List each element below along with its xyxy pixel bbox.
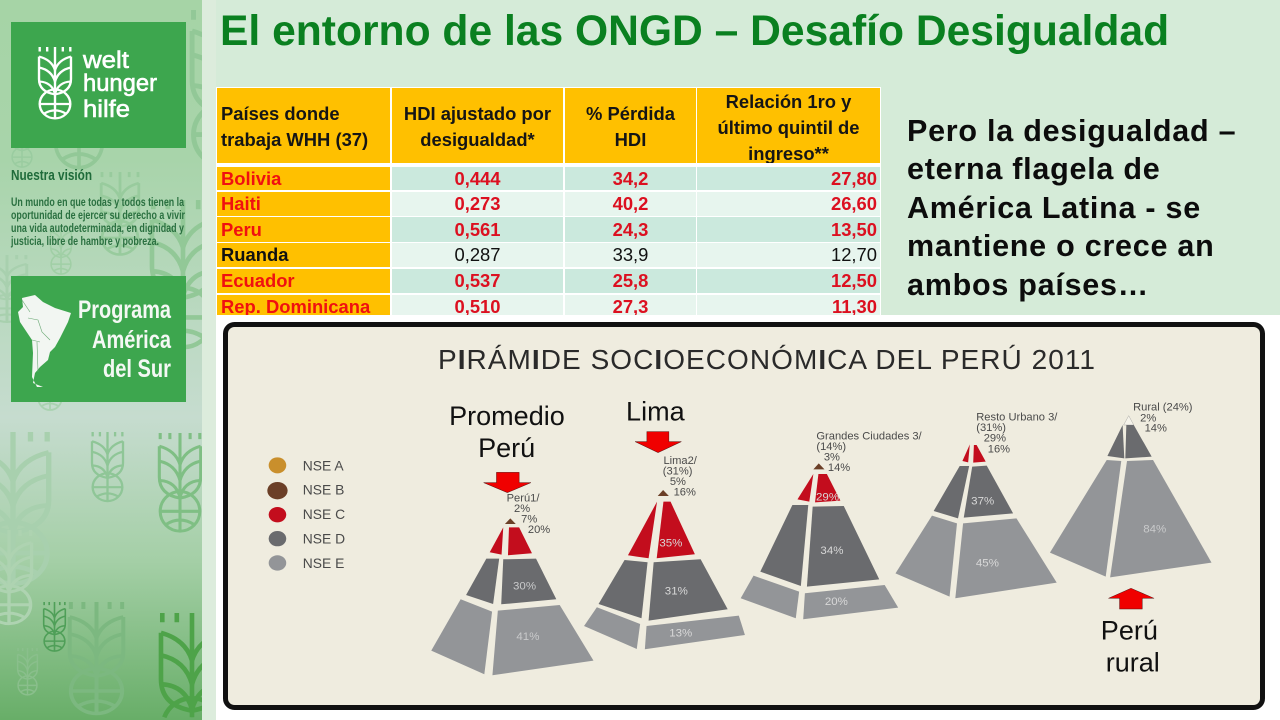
label: Perú rural: Perú [1101, 615, 1158, 645]
program name: del Sur [103, 355, 171, 383]
row: Peru [217, 217, 880, 242]
table header [217, 88, 880, 163]
pyramid: Grandes Ciudades: 14% [828, 462, 850, 474]
row: Peru: 0,561 [454, 218, 501, 240]
row: Bolivia: 0,444 [454, 168, 501, 188]
logo wordmark [82, 47, 157, 123]
table header: ingreso** [748, 142, 829, 163]
pyramid: Resto Urbano: 45% [976, 558, 999, 570]
table header: desigualdad* [420, 129, 535, 150]
pyramid: Grandes Ciudades: Grandes Ciudades 3/ [816, 430, 923, 442]
pyramid: Perú: 2% [514, 503, 530, 515]
legend: NSE C [303, 507, 345, 522]
vision text [10, 195, 185, 248]
program name: Programa [78, 296, 172, 324]
table: inequality data [216, 87, 881, 315]
chart title: PIRÁMIDE SOCIOECONÓMICA DEL PERÚ 2011 [438, 344, 1095, 375]
row: Ecuador: 12,50 [831, 270, 877, 291]
label: Promedio Perú [449, 401, 565, 463]
row: Ruanda: 0,287 [454, 244, 501, 265]
pyramid: Resto Urbano: 37% [971, 495, 994, 507]
pyramid: Resto Urbano [895, 411, 1058, 598]
legend: NSE E [303, 556, 344, 571]
row: Ecuador: 25,8 [613, 270, 648, 291]
table header: último quintil de [718, 116, 860, 138]
row: Ecuador: 0,537 [454, 270, 501, 291]
row: Bolivia [217, 167, 880, 190]
table header: % Pérdida [586, 103, 675, 124]
pyramid: Perú: 30% [513, 581, 536, 593]
pyramid: Perú: 7% [521, 513, 537, 525]
pyramid: Rural: Rural (24%) [1133, 402, 1193, 414]
pyramid: Resto Urbano: 16% [988, 443, 1010, 455]
logo wordmark: hilfe [83, 96, 130, 123]
callout text: ambos países… [907, 268, 1149, 302]
row: Ruanda: Ruanda [221, 244, 288, 265]
program name [78, 296, 172, 383]
pyramid: Rural: 14% [1145, 423, 1167, 435]
arrow: Perú rural [1108, 588, 1154, 609]
pyramid: Perú: 41% [516, 631, 539, 643]
row: Bolivia: 27,80 [831, 168, 877, 188]
callout text: América Latina - se [907, 190, 1201, 224]
arrow: Promedio Perú [484, 472, 531, 493]
row: Rep. Dominicana [217, 295, 880, 315]
table header: HDI ajustado por [404, 103, 551, 124]
pyramid: Grandes Ciudades: 3% [824, 451, 840, 463]
row: Haiti [217, 192, 880, 216]
pyramid: Resto Urbano: Resto Urbano 3/ [976, 411, 1058, 423]
row: Bolivia: 34,2 [613, 168, 648, 188]
label: Perú rural: rural [1106, 648, 1160, 678]
pyramid: Lima: 16% [674, 486, 696, 498]
pyramid: Lima: (31%) [663, 465, 693, 477]
arrow: Lima [635, 432, 681, 453]
logo wordmark: hunger [83, 70, 157, 97]
table header: Países donde [221, 103, 340, 124]
pyramid: Grandes Ciudades: 20% [825, 596, 848, 608]
pyramid: Rural: 2% [1140, 412, 1156, 424]
row: Haiti: 40,2 [613, 193, 648, 214]
row: Ecuador [217, 269, 880, 293]
pyramid: Lima [584, 455, 745, 649]
table header: trabaja WHH (37) [221, 129, 368, 150]
row: Ruanda [217, 243, 880, 267]
pyramid: Grandes Ciudades: 29% [816, 491, 839, 503]
row: Bolivia: Bolivia [221, 168, 281, 188]
pyramid: Resto Urbano: 29% [984, 433, 1006, 445]
logo: welt hunger hilfe [11, 22, 186, 148]
icon: South America map [18, 295, 71, 387]
callout text: mantiene o crece an [907, 229, 1215, 263]
callout text: Pero la desigualdad – [907, 114, 1236, 148]
logo wordmark: welt [82, 47, 129, 74]
pyramid: Grandes Ciudades [741, 430, 923, 619]
legend: NSE D [303, 531, 345, 546]
label: Perú rural [1101, 615, 1160, 678]
row: Peru: 13,50 [831, 218, 877, 240]
program name: América [92, 326, 172, 354]
logo: Programa América del Sur [11, 276, 186, 402]
legend: NSE B [303, 483, 344, 498]
label: Promedio Perú: Promedio [449, 401, 565, 431]
legend [267, 457, 345, 571]
vision text: justicia, libre de hambre y pobreza. [10, 234, 159, 248]
pyramid: Lima: Lima2/ [663, 455, 698, 467]
pyramid: Lima: 5% [670, 476, 686, 488]
label: Lima: Lima [626, 397, 685, 427]
pyramid: Grandes Ciudades: 34% [820, 545, 843, 557]
callout text: eterna flagela de [907, 152, 1160, 186]
pyramid: Rural: 84% [1143, 523, 1166, 535]
row: Peru: 24,3 [613, 218, 648, 240]
title: El entorno de las ONGD – Desafío Desigualdad [220, 7, 1169, 55]
row: Haiti: 26,60 [831, 193, 877, 214]
pyramid: Resto Urbano: (31%) [976, 422, 1006, 434]
row: Peru: Peru [221, 218, 262, 240]
pyramid: Grandes Ciudades: (14%) [816, 441, 846, 453]
pyramid: Rural [1050, 402, 1212, 577]
pyramid: Perú [431, 492, 593, 675]
icon: wheat logo [39, 47, 71, 118]
row: Ecuador: Ecuador [221, 270, 295, 291]
row: Haiti: Haiti [221, 193, 261, 214]
pyramid: Lima: 35% [659, 537, 682, 549]
pyramid: Lima: 13% [669, 628, 692, 640]
row: Ruanda: 12,70 [831, 244, 877, 265]
label: Promedio Perú: Perú [478, 433, 535, 463]
legend: NSE A [303, 458, 344, 473]
callout text [907, 114, 1236, 302]
row: Haiti: 0,273 [454, 193, 501, 214]
table header: Relación 1ro y [726, 90, 851, 112]
vision heading: Nuestra visión [11, 167, 92, 184]
pyramid: Lima: 31% [665, 585, 688, 597]
pyramid: Perú: Perú1/ [507, 492, 540, 504]
sidebar [0, 0, 202, 720]
row: Ruanda: 33,9 [613, 244, 648, 265]
white backing for chart [216, 315, 1280, 720]
pyramid: Perú: 20% [528, 524, 550, 536]
table header: HDI [615, 129, 646, 150]
